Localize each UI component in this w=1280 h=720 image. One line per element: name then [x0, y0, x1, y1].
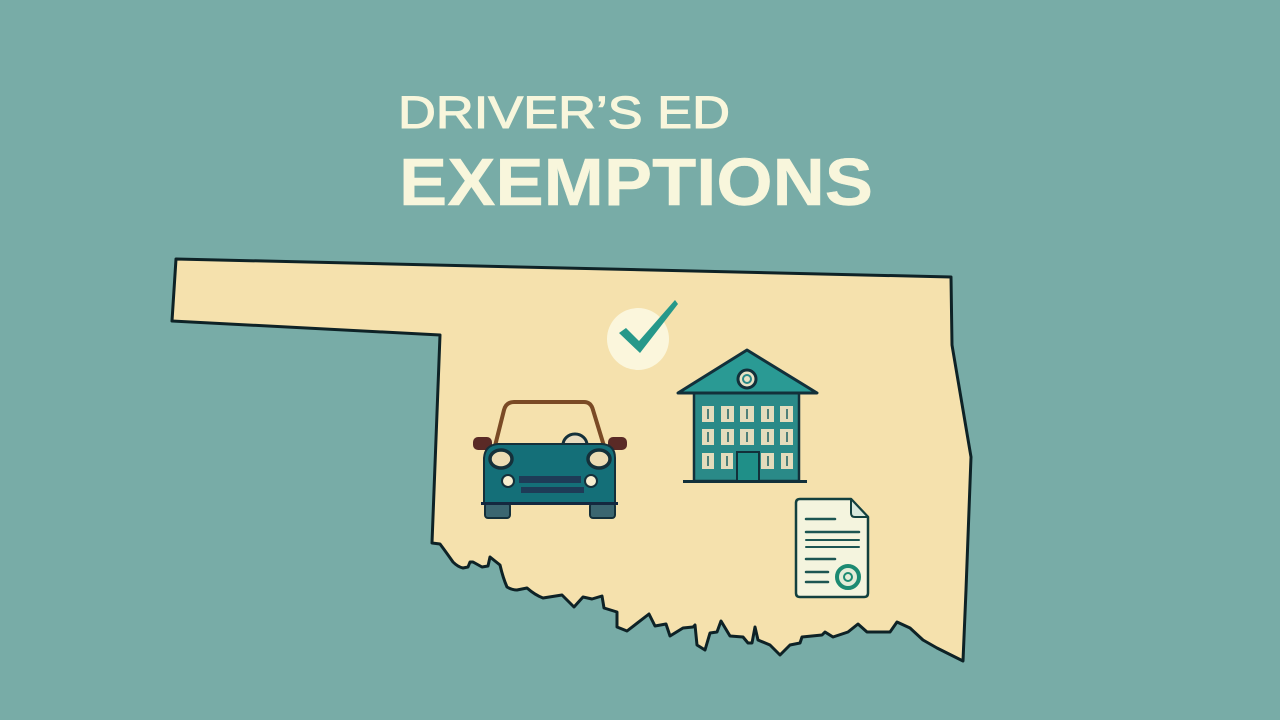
icon: check mark badge: [607, 300, 678, 370]
title line: driver's ed: DRIVER’S ED: [398, 87, 730, 138]
map: Oklahoma outline: [172, 259, 971, 661]
icon: certificate document: [796, 499, 868, 597]
title line: exemptions: EXEMPTIONS: [399, 145, 873, 220]
title: [398, 87, 873, 220]
icon: car: [473, 402, 627, 518]
icon: school building: [678, 350, 817, 483]
